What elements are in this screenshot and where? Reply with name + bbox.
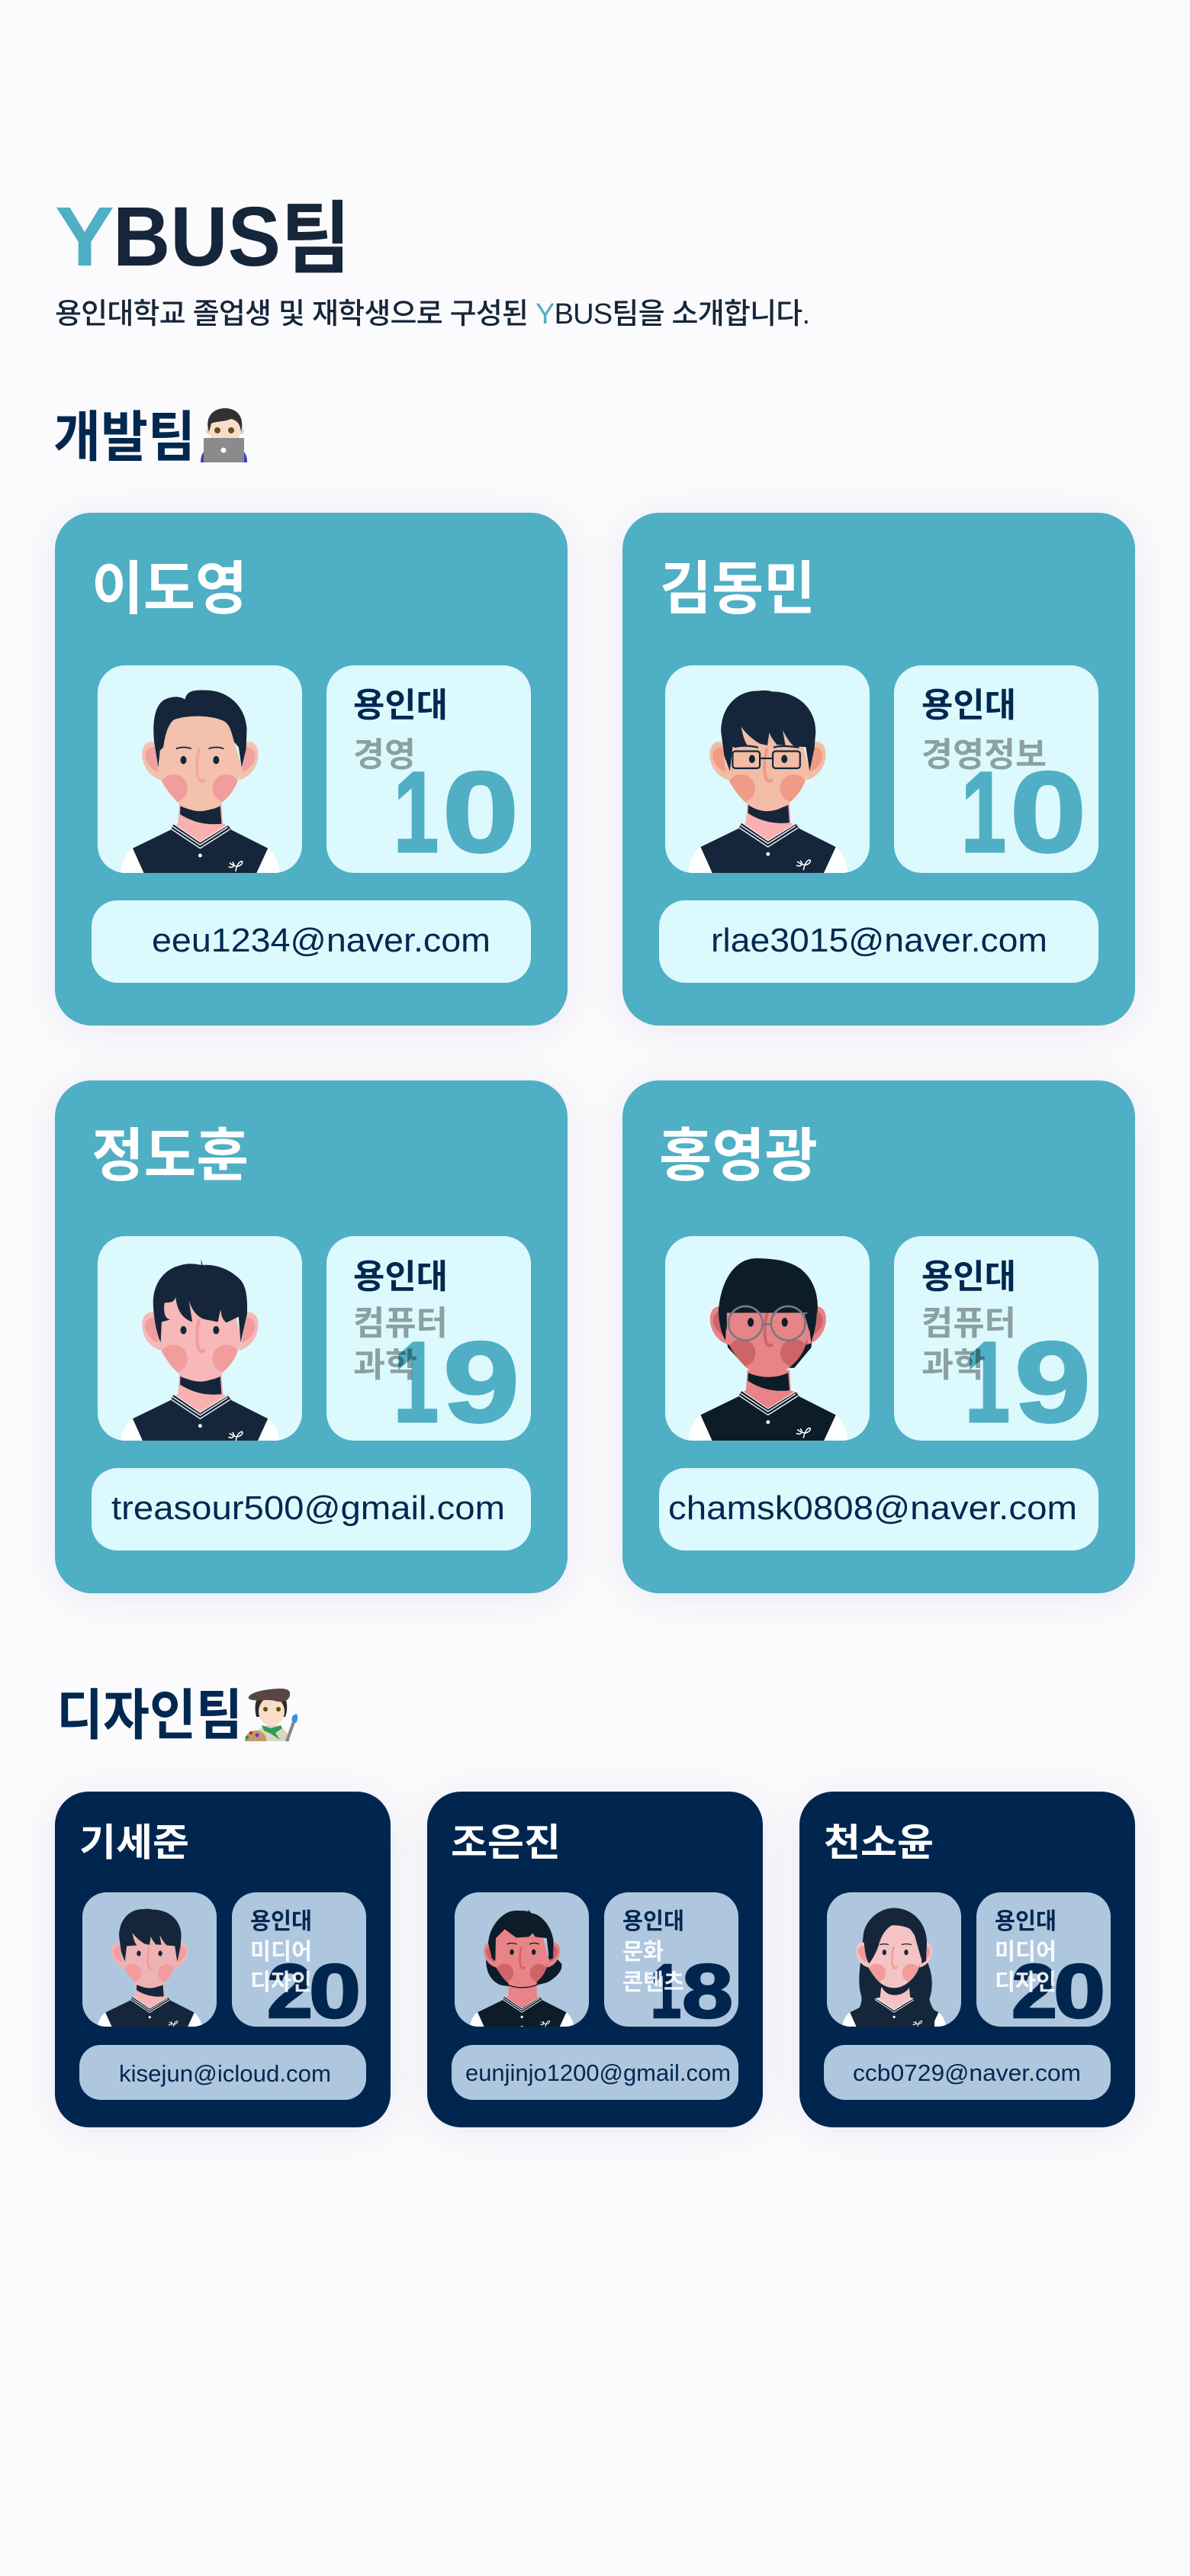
avatar tile — [665, 665, 870, 874]
info tile: 디자인 — [995, 1970, 1057, 1995]
icon: artist — [245, 1689, 298, 1741]
info tile — [894, 665, 1098, 876]
email pill: chamsk0808@naver.com — [668, 1489, 1077, 1527]
avatar tile — [82, 1892, 217, 2030]
name: 정도훈 — [92, 1124, 249, 1189]
card background — [622, 1080, 1135, 1593]
panel: member card 이도영 — [55, 513, 568, 1026]
name: 조은진 — [451, 1821, 561, 1864]
info tile — [894, 1236, 1098, 1446]
card background — [55, 1792, 391, 2127]
email pill — [452, 2045, 738, 2100]
info tile: 2 — [267, 1949, 313, 2034]
email pill — [92, 1468, 531, 1550]
avatar tile — [98, 665, 302, 875]
panel: member card 김동민 — [622, 513, 1135, 1026]
info tile: 9 — [443, 1318, 519, 1446]
avatar tile — [455, 1892, 589, 2030]
email pill: kisejun@icloud.com — [119, 2060, 331, 2087]
info tile: 용인대 — [353, 687, 448, 724]
name: 김동민 — [660, 557, 815, 622]
email pill: rlae3015@naver.com — [711, 922, 1047, 959]
info tile: 미디어 — [250, 1940, 312, 1965]
card background — [622, 513, 1135, 1026]
info tile: 1 — [961, 748, 1006, 876]
card background — [55, 513, 568, 1026]
name: 천소윤 — [824, 1821, 934, 1864]
avatar tile — [98, 1236, 302, 1445]
email pill — [92, 900, 531, 983]
name: 이도영 — [92, 557, 247, 622]
panel: member card 정도훈 — [55, 1080, 568, 1593]
info tile — [976, 1892, 1111, 2034]
info tile: 1 — [651, 1949, 681, 2034]
info tile: 용인대 — [921, 1258, 1016, 1296]
name: 기세준 — [79, 1821, 189, 1864]
email pill: eunjinjo1200@gmail.com — [465, 2059, 731, 2086]
info tile: 용인대 — [995, 1909, 1057, 1934]
panel: member card 홍영광 — [622, 1080, 1135, 1593]
email pill — [659, 1468, 1098, 1550]
info tile: 1 — [394, 748, 439, 876]
email pill — [659, 900, 1098, 983]
info tile: 0 — [442, 748, 519, 876]
panel: member card 조은진 — [427, 1792, 763, 2127]
card background — [55, 1080, 568, 1593]
info tile: 문화 — [622, 1940, 664, 1965]
heading: design team: 디자인팀 — [56, 1686, 243, 1747]
email pill: eeu1234@naver.com — [152, 922, 490, 959]
info tile: 용인대 — [353, 1258, 448, 1296]
info tile — [604, 1892, 738, 2034]
info tile: 0 — [309, 1949, 361, 2034]
info tile: 과학 — [353, 1347, 417, 1384]
info tile: 1 — [965, 1318, 1010, 1446]
info tile — [326, 665, 531, 876]
email pill: treasour500@gmail.com — [111, 1489, 505, 1527]
card background — [427, 1792, 763, 2127]
info tile — [232, 1892, 366, 2034]
info tile: 컴퓨터 — [921, 1305, 1016, 1342]
email pill — [79, 2045, 366, 2100]
info tile: 미디어 — [995, 1940, 1057, 1965]
icon: person with laptop — [201, 408, 247, 462]
name: 홍영광 — [659, 1124, 818, 1189]
panel: member card 기세준 — [55, 1792, 391, 2127]
info tile: 디자인 — [250, 1970, 312, 1995]
subtitle text: 용인대학교 졸업생 및 재학생으로 구성된 YBUS팀을 소개합니다. — [55, 298, 810, 330]
info tile: 2 — [1011, 1949, 1057, 2034]
info tile: 용인대 — [622, 1909, 684, 1934]
info tile: 경영정보 — [921, 736, 1047, 774]
info tile: 8 — [682, 1949, 733, 2034]
heading: development team: 개발팀 — [53, 407, 195, 469]
title: BUS — [113, 190, 281, 284]
title — [55, 190, 351, 284]
info tile — [326, 1236, 531, 1446]
info tile: 용인대 — [250, 1909, 312, 1934]
info tile: 0 — [1010, 748, 1086, 876]
info tile: 콘텐츠 — [622, 1970, 684, 1995]
info tile: 1 — [394, 1318, 439, 1446]
info tile: 과학 — [921, 1347, 986, 1384]
info tile: 0 — [1053, 1949, 1105, 2034]
title: 팀 — [281, 195, 351, 284]
avatar tile — [665, 1236, 870, 1441]
card background — [799, 1792, 1135, 2127]
info tile: 컴퓨터 — [353, 1305, 448, 1342]
title: Y — [55, 190, 114, 284]
info tile: 용인대 — [921, 687, 1016, 724]
avatar tile — [827, 1892, 961, 2030]
info tile: 9 — [1015, 1318, 1091, 1446]
email pill: ccb0729@naver.com — [853, 2059, 1081, 2086]
info tile: 경영 — [353, 736, 416, 774]
email pill — [824, 2045, 1111, 2100]
panel: member card 천소윤 — [799, 1792, 1135, 2127]
